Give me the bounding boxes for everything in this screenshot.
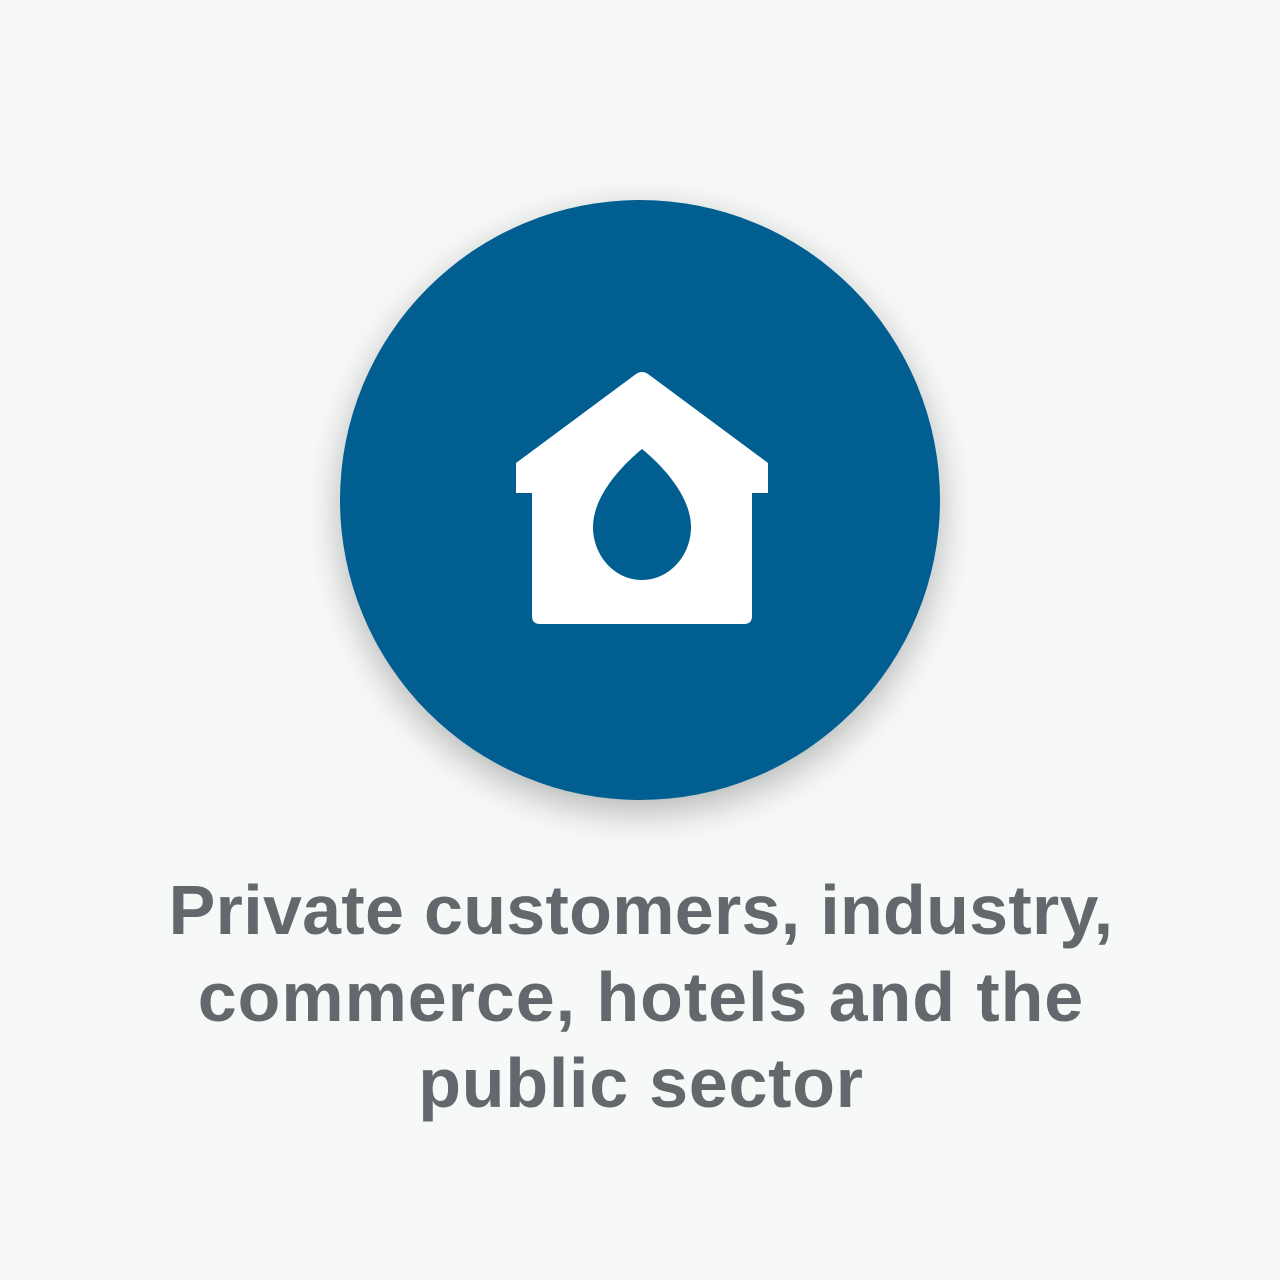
caption text: public sector: [418, 1044, 864, 1122]
caption text: Private customers, industry,: [169, 871, 1113, 949]
caption text: commerce, hotels and the: [198, 958, 1084, 1036]
panel: blue circle: [340, 200, 940, 800]
caption text: [169, 871, 1113, 1122]
